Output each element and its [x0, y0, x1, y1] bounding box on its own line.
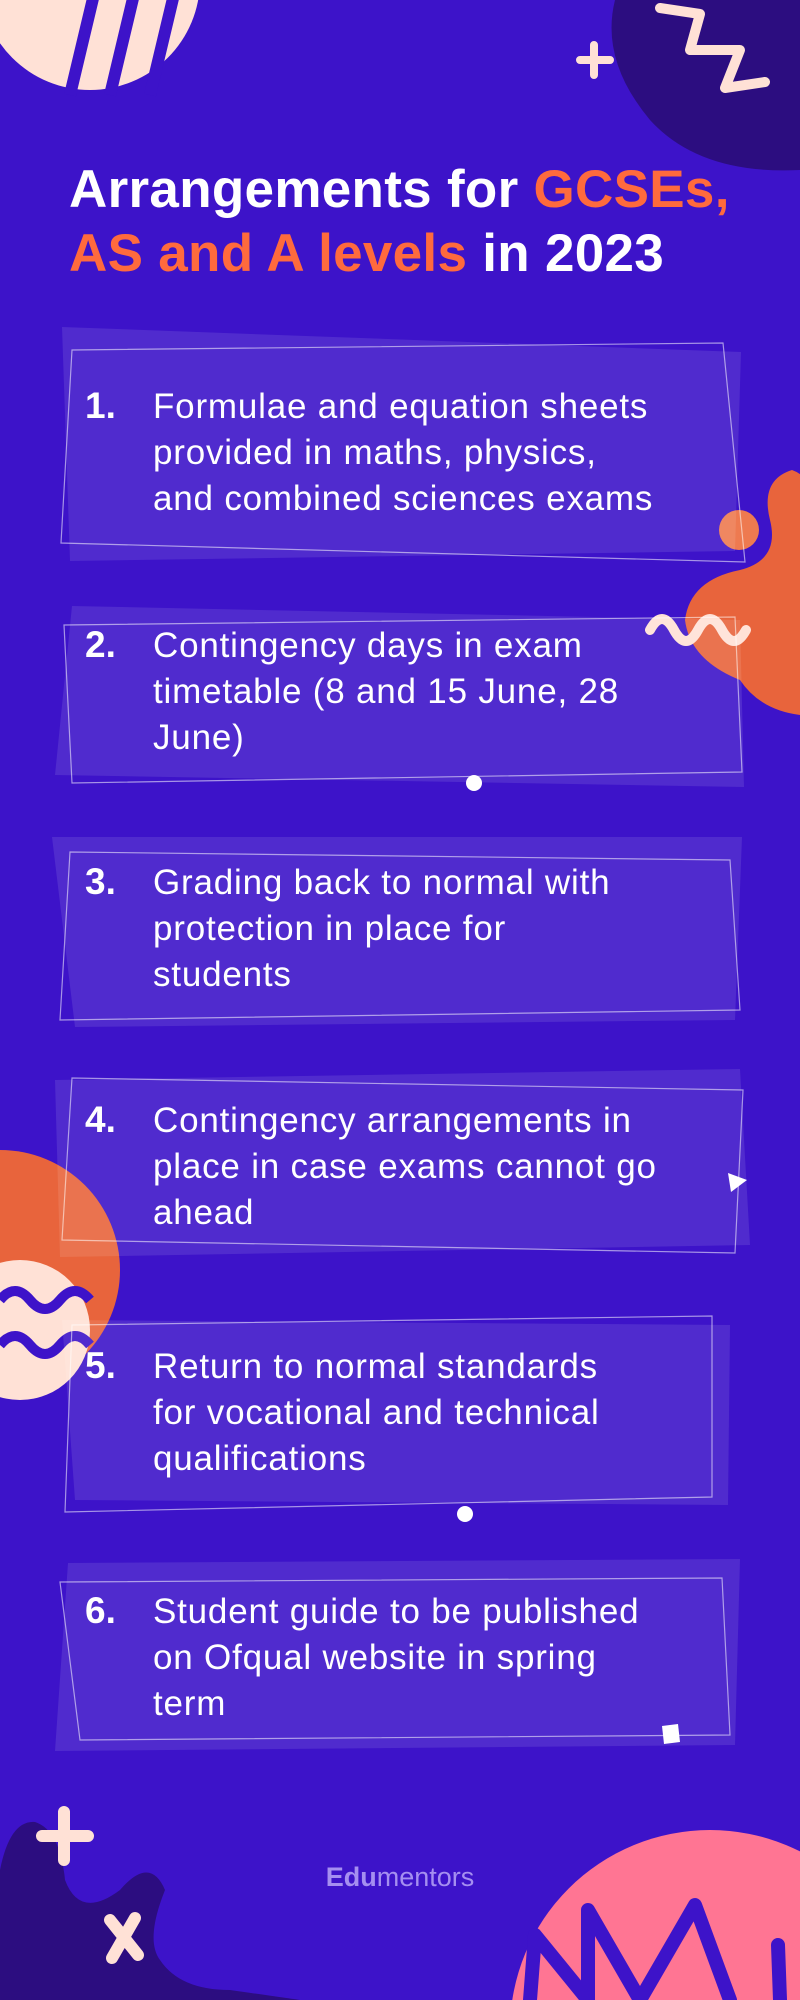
text: qualifications — [153, 1439, 367, 1478]
decoration: right orange blob — [650, 470, 800, 715]
text: 3. — [85, 861, 116, 902]
decorative dots — [457, 775, 747, 1744]
logo: Edumentors: Edumentors — [326, 1862, 474, 1892]
text: Contingency arrangements in — [153, 1101, 632, 1140]
text: students — [153, 955, 292, 994]
item 4 — [85, 1099, 657, 1232]
item 2 — [85, 624, 619, 757]
text: Grading back to normal with — [153, 863, 610, 902]
decoration: bottom-right pink circle — [510, 1830, 800, 2000]
item 6 — [85, 1590, 639, 1723]
text: Return to normal standards — [153, 1347, 598, 1386]
text: and combined sciences exams — [153, 479, 653, 518]
text: 6. — [85, 1590, 116, 1631]
item 5 — [85, 1345, 600, 1478]
decoration: bottom-left dark blob — [0, 1812, 300, 2000]
text: June) — [153, 718, 245, 757]
text: 1. — [85, 385, 116, 426]
item 3 — [85, 861, 610, 994]
text: ahead — [153, 1193, 254, 1232]
text: timetable (8 and 15 June, 28 — [153, 672, 619, 711]
text: on Ofqual website in spring — [153, 1638, 597, 1677]
text: provided in maths, physics, — [153, 433, 597, 472]
text: Student guide to be published — [153, 1592, 639, 1631]
decoration: left orange circle — [0, 1150, 120, 1400]
text: Contingency days in exam — [153, 626, 583, 665]
title: Arrangements for GCSEs, — [69, 160, 730, 219]
text: 2. — [85, 624, 116, 665]
text: 4. — [85, 1099, 116, 1140]
decoration: top-left peach circle — [0, 0, 200, 95]
title: AS and A levels in 2023 — [69, 224, 664, 283]
item 1 — [85, 385, 653, 518]
title — [69, 160, 730, 283]
decoration: top-right dark blob — [580, 0, 800, 170]
text: 5. — [85, 1345, 116, 1386]
text: Formulae and equation sheets — [153, 387, 648, 426]
text: term — [153, 1684, 226, 1723]
text: protection in place for — [153, 909, 506, 948]
text: for vocational and technical — [153, 1393, 600, 1432]
text: place in case exams cannot go — [153, 1147, 657, 1186]
card backgrounds — [52, 327, 750, 1751]
